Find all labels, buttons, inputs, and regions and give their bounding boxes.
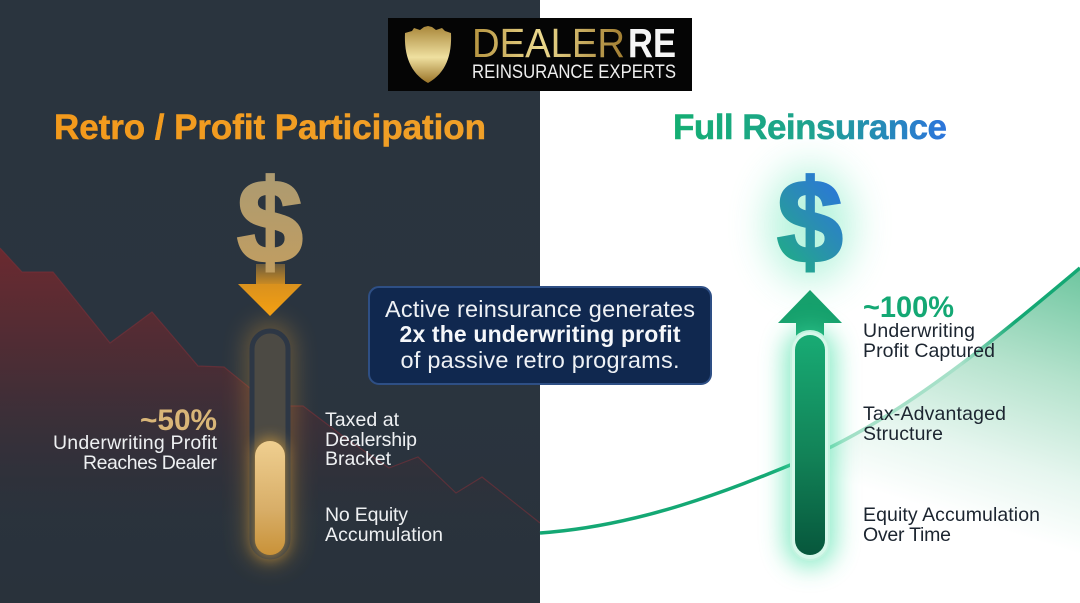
stat: 50 percent: ~50%	[140, 404, 217, 437]
thermometer: half filled	[246, 322, 294, 564]
note: equity	[863, 504, 1040, 546]
callout: 2x the underwriting profit	[400, 321, 681, 347]
stat: 100 percent: Underwriting	[863, 320, 975, 342]
note: taxed	[325, 409, 417, 470]
note: no equity: Accumulation	[325, 524, 443, 546]
stat: 100 percent: ~100%	[863, 291, 954, 324]
note: tax advantaged: Tax-Advantaged	[863, 403, 1006, 425]
heading: retro: Retro / Profit Participation	[54, 108, 486, 147]
callout: of passive retro programs.	[400, 347, 680, 373]
panel: retro profit participation	[0, 0, 540, 603]
red declining chart	[0, 248, 540, 603]
note: no equity	[325, 504, 443, 546]
wordmark: RE	[628, 20, 676, 66]
stat: 100 percent: Profit Captured	[863, 340, 995, 362]
icon: gold shield	[405, 26, 451, 83]
icon: muted dollar: $	[237, 156, 303, 288]
panel: full reinsurance	[540, 0, 1080, 603]
arrow: down	[238, 264, 302, 316]
logo	[388, 18, 692, 91]
stat: 100 percent	[863, 291, 995, 362]
wordmark	[472, 20, 676, 83]
note: equity: Over Time	[863, 524, 951, 546]
note: no equity: No Equity	[325, 504, 408, 526]
wordmark: DEALER	[472, 20, 625, 66]
icon: glowing dollar: $	[777, 156, 843, 288]
note: equity: Equity Accumulation	[863, 504, 1040, 526]
heading: full reinsurance: Full Reinsurance	[673, 108, 947, 147]
note: taxed: Bracket	[325, 448, 392, 470]
callout: Active reinsurance generates	[385, 296, 695, 322]
stat: 50 percent: Reaches Dealer	[83, 452, 218, 474]
green growth curve	[540, 268, 1080, 603]
arrow: up	[778, 290, 842, 340]
thermometer: full	[784, 328, 836, 568]
note: taxed: Dealership	[325, 429, 417, 451]
stat: 50 percent: Underwriting Profit	[53, 432, 218, 454]
stat: 50 percent	[53, 404, 218, 474]
note: tax advantaged	[863, 403, 1006, 445]
wordmark: REINSURANCE EXPERTS	[472, 62, 676, 83]
note: taxed: Taxed at	[325, 409, 400, 431]
callout	[369, 287, 711, 384]
note: tax advantaged: Structure	[863, 423, 943, 445]
